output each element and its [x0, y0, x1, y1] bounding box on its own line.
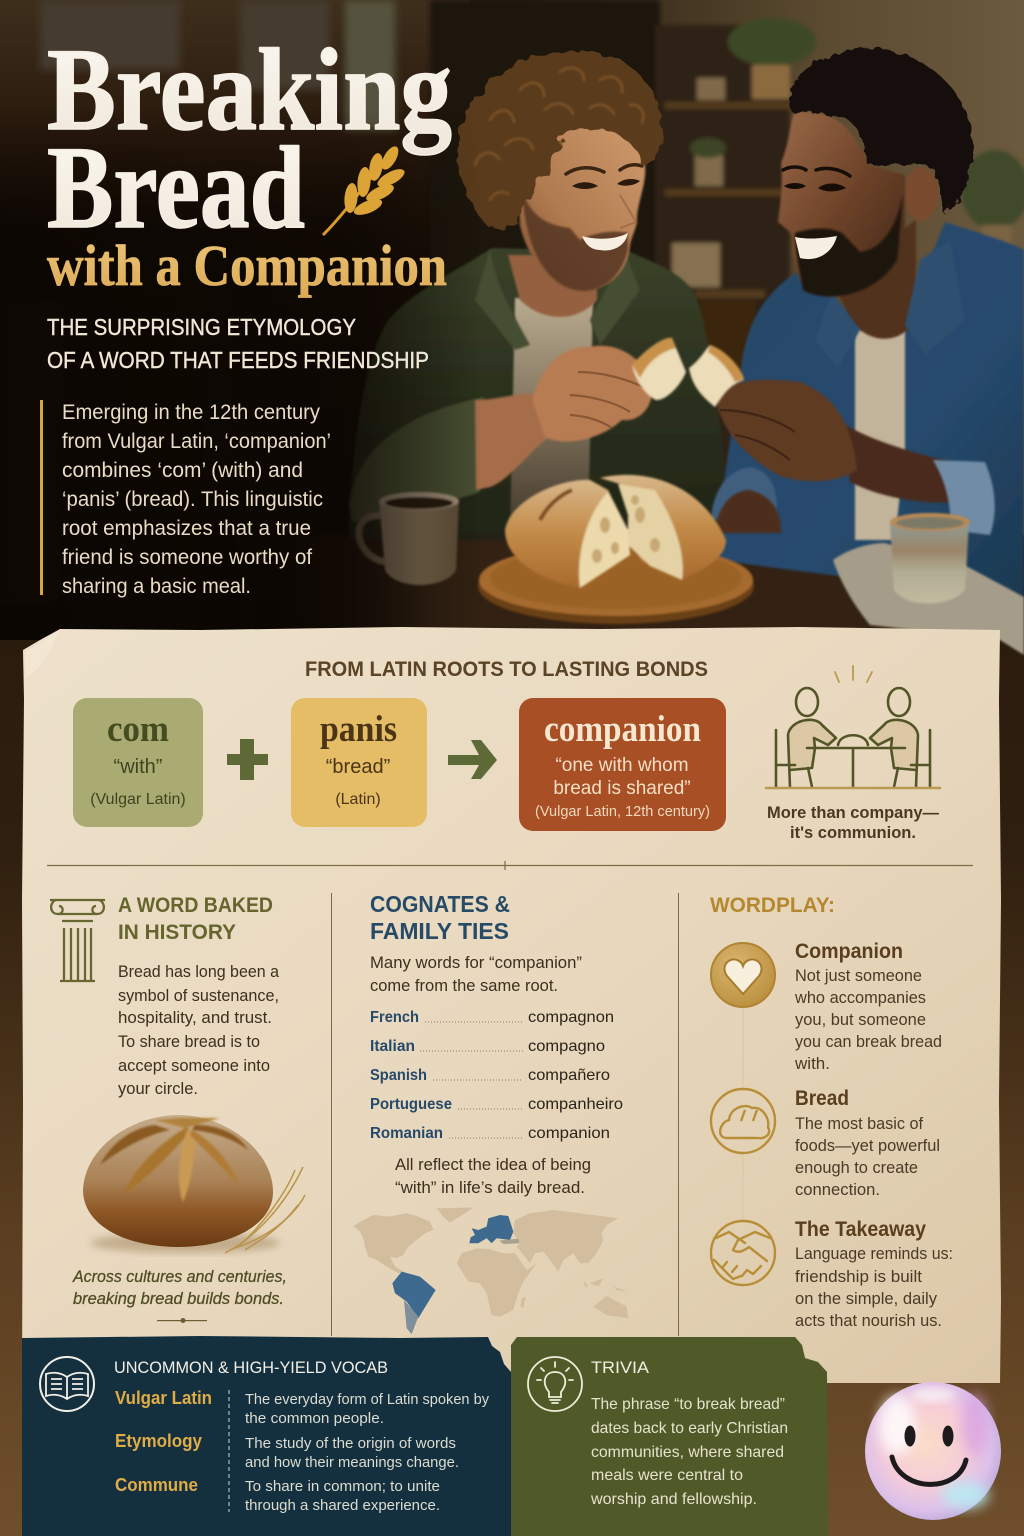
tagline: THE SURPRISING ETYMOLOGY [47, 314, 356, 340]
icon: greek column [50, 900, 105, 981]
caption: more than company: More than company— [767, 804, 939, 822]
smile [795, 236, 837, 259]
short black hair [790, 48, 973, 215]
cognate list [370, 1009, 623, 1142]
item: the takeaway: on the simple, daily [795, 1290, 938, 1308]
curly hair [458, 52, 662, 230]
icon: heart [711, 943, 775, 1007]
body text: To share bread is to [118, 1032, 260, 1051]
column: cognates and family ties: FAMILY TIES [370, 918, 509, 944]
closing note [395, 1155, 591, 1197]
column: a word baked in history: IN HISTORY [118, 921, 236, 944]
item: the takeaway: acts that nourish us. [795, 1312, 942, 1330]
plus sign [227, 739, 268, 780]
root box: panis [291, 698, 427, 827]
collar [815, 240, 965, 368]
intro paragraph: combines ‘com’ (with) and [62, 458, 303, 482]
section heading: FROM LATIN ROOTS TO LASTING BONDS [305, 658, 708, 681]
cognate list: Romanian [370, 1125, 443, 1142]
torso [349, 248, 726, 540]
hero photo: two friends sharing bread [0, 0, 1024, 655]
wooden board [478, 544, 754, 624]
icon: light bulb [528, 1357, 582, 1411]
item: the takeaway: Language reminds us: [795, 1245, 953, 1263]
collar [475, 248, 640, 350]
body text: symbol of sustenance, [118, 986, 279, 1005]
intro: come from the same root. [370, 976, 558, 995]
face [518, 126, 645, 290]
item: the takeaway: The Takeaway [795, 1217, 926, 1241]
intro paragraph: from Vulgar Latin, ‘companion’ [62, 429, 331, 453]
heading: UNCOMMON & HIGH-YIELD VOCAB [114, 1358, 388, 1377]
term: vulgar latin: the common people. [245, 1410, 384, 1427]
icon: bread [711, 1089, 775, 1153]
arrow [448, 740, 497, 779]
body text: The phrase “to break bread” [591, 1396, 785, 1413]
ear [904, 167, 938, 221]
cognate list: compañero [528, 1067, 610, 1084]
body text: Bread has long been a [118, 962, 279, 981]
body text: hospitality, and trust. [118, 1008, 272, 1027]
term: etymology: Etymology [115, 1431, 202, 1451]
smile [582, 233, 628, 250]
window glow [0, 0, 395, 600]
cognate list: compagnon [528, 1009, 614, 1026]
root box: com: “with” [114, 756, 162, 778]
heading: COGNATES & [370, 891, 510, 917]
cognate list: Portuguese [370, 1096, 452, 1113]
subtitle: with a Companion: with a Companion [47, 233, 447, 298]
item: bread: enough to create [795, 1159, 918, 1177]
item: the takeaway [795, 1217, 953, 1330]
column: cognates and family ties [353, 891, 628, 1334]
rolled cuff [933, 460, 995, 535]
panel: parchment [22, 627, 1001, 1383]
term: commune: Commune [115, 1475, 198, 1495]
tee [510, 298, 593, 535]
panel: trivia [511, 1337, 828, 1536]
item: companion: with. [794, 1055, 830, 1073]
term: etymology: The study of the origin of words [245, 1435, 456, 1452]
neck [833, 220, 916, 339]
closing note: All reflect the idea of being [395, 1155, 591, 1174]
intro paragraph: friend is someone worthy of [62, 545, 312, 569]
term: vulgar latin: Vulgar Latin [115, 1388, 212, 1408]
left side dark overlay, soft-edged [0, 146, 462, 628]
beard [522, 190, 628, 291]
eyes and brows [784, 183, 846, 191]
title line: Breaking: Breaking [47, 24, 452, 155]
item: bread: connection. [795, 1181, 880, 1199]
icon: two people sharing at table [766, 666, 940, 788]
cognate list: French [370, 1009, 419, 1026]
tagline [47, 314, 429, 373]
intro paragraph: sharing a basic meal. [62, 574, 251, 598]
closing note: “with” in life’s daily bread. [395, 1178, 585, 1197]
column: a word baked in history [50, 894, 305, 1323]
left mug [359, 492, 459, 585]
intro paragraph [40, 400, 331, 598]
caption: breaking bread builds bonds. [73, 1290, 284, 1308]
column: wordplay [710, 894, 953, 1330]
item: bread: Bread [795, 1086, 849, 1110]
body text: your circle. [118, 1079, 198, 1098]
term: commune: To share in common; to unite [245, 1478, 440, 1495]
result box: companion: companion [544, 709, 701, 750]
title line: Bread: Bread [47, 122, 305, 253]
cognate list: companion [528, 1125, 610, 1142]
root box: panis: panis [320, 709, 397, 750]
item: the takeaway: friendship is built [795, 1268, 922, 1286]
table [280, 535, 1024, 640]
heading: WORDPLAY: [710, 894, 835, 917]
ear [493, 168, 519, 218]
neck [508, 255, 597, 317]
near-side cuff and tucked hand [711, 467, 777, 520]
cognate list: companheiro [528, 1096, 623, 1113]
heading: A WORD BAKED [118, 894, 273, 917]
caption: Across cultures and centuries, [72, 1268, 287, 1286]
cognate list: compagno [528, 1038, 605, 1055]
item: companion: Companion [795, 939, 903, 963]
linen cloth [833, 543, 1024, 655]
forearm [475, 394, 552, 490]
result box: companion [519, 698, 726, 831]
title [47, 24, 452, 298]
world map [353, 1207, 628, 1334]
caption [72, 1268, 287, 1308]
icon: handshake [711, 1221, 775, 1285]
root box: com: (Vulgar Latin) [90, 791, 186, 808]
term: vulgar latin [115, 1388, 489, 1427]
intro: Many words for “companion” [370, 953, 582, 972]
left man [349, 52, 726, 540]
term: commune [115, 1475, 440, 1514]
term: etymology: and how their meanings change. [245, 1454, 459, 1471]
forearm [842, 423, 958, 503]
cognate list: Italian [370, 1038, 415, 1055]
heading: TRIVIA [591, 1358, 650, 1377]
item: companion: who accompanies [794, 989, 926, 1007]
icon: wheat [323, 144, 407, 235]
beard [795, 195, 903, 296]
intro [370, 953, 582, 995]
hand [532, 346, 652, 442]
ornament [157, 1318, 207, 1323]
term: commune: through a shared experience. [245, 1497, 440, 1514]
icon: open book [40, 1357, 94, 1411]
torso [715, 222, 1024, 600]
right mug [890, 513, 970, 604]
cognate list: Spanish [370, 1067, 427, 1084]
term: etymology [115, 1431, 459, 1471]
body text: communities, where shared [591, 1444, 784, 1461]
root box: panis: (Latin) [335, 791, 381, 808]
result box: companion: bread is shared” [553, 778, 691, 799]
root box: panis: “bread” [326, 756, 390, 778]
wall and shelves with plants [430, 0, 1024, 535]
item: companion: Not just someone [795, 967, 922, 985]
root box: com [73, 698, 203, 827]
intro paragraph: Emerging in the 12th century [62, 400, 320, 424]
smiley bubble [865, 1382, 1001, 1520]
item: companion [794, 939, 942, 1073]
tee [855, 330, 905, 540]
item: bread: The most basic of [795, 1115, 923, 1133]
sourdough loaf [505, 475, 726, 588]
item: companion: you can break bread [795, 1033, 942, 1051]
term: vulgar latin: The everyday form of Latin spoken by [245, 1391, 489, 1408]
body text: worship and fellowship. [590, 1491, 757, 1508]
paper corner curl [25, 630, 60, 678]
result box: companion: “one with whom [555, 755, 689, 776]
bread pieces in hands [632, 338, 744, 407]
body text [590, 1396, 788, 1508]
item: bread: foods—yet powerful [795, 1137, 940, 1155]
root box: com: com [107, 709, 169, 750]
face [778, 112, 905, 295]
left sleeve [349, 397, 484, 522]
body text: dates back to early Christian [591, 1420, 788, 1437]
intro paragraph: ‘panis’ (bread). This linguistic [62, 487, 323, 511]
body text: accept someone into [118, 1056, 270, 1075]
item: bread [795, 1086, 940, 1199]
caption: more than company [767, 804, 939, 842]
caption: more than company: it's communion. [790, 824, 916, 842]
result box: companion: (Vulgar Latin, 12th century) [535, 803, 710, 820]
body text [118, 962, 279, 1098]
illustration: rustic loaf with wheat [83, 1115, 305, 1253]
intro paragraph: root emphasizes that a true [62, 516, 311, 540]
tagline: OF A WORD THAT FEEDS FRIENDSHIP [47, 347, 429, 373]
panel: vocabulary [22, 1336, 511, 1536]
body text: meals were central to [591, 1467, 743, 1484]
eyes and brows [572, 179, 640, 189]
hand [715, 380, 857, 481]
item: companion: you, but someone [795, 1011, 926, 1029]
right man [711, 48, 1024, 600]
